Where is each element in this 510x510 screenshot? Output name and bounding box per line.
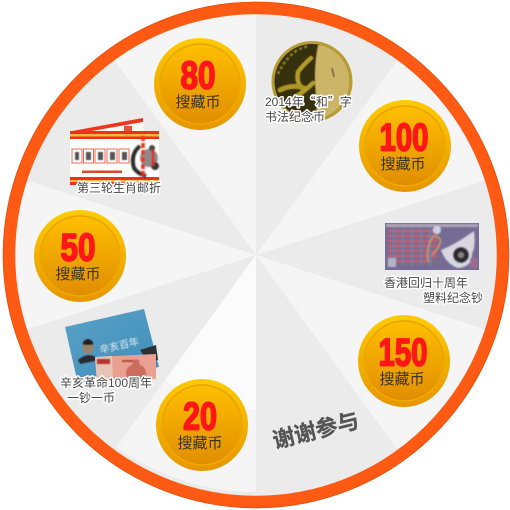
coin label: 书法纪念币 (265, 109, 325, 124)
prize image: Xinhai revolution note and coin (65, 309, 159, 384)
prize: 150 coins (358, 315, 450, 407)
coin label (265, 93, 352, 124)
banknote label: 塑料纪念钞 (423, 290, 483, 305)
prize image: commemorative coin (272, 41, 352, 122)
coin label: 2014年“和”字 (265, 93, 352, 110)
prize: 80 coins: 搜藏币 (175, 94, 221, 111)
banknote label: 香港回归十周年 (384, 276, 468, 290)
prize: 80 coins: 80 (180, 54, 216, 98)
folder label: 第三轮生肖邮折 (77, 180, 161, 195)
prize: 20 coins: 20 (183, 396, 217, 438)
prize: 20 coins: 搜藏币 (177, 435, 223, 452)
note label: 辛亥革命100周年 (60, 375, 152, 390)
prize: 100 coins: 100 (380, 116, 428, 160)
prize: 50 coins: 50 (60, 226, 96, 270)
prize: 100 coins: 搜藏币 (380, 156, 426, 173)
prize: 100 coins (359, 100, 451, 192)
prize image: Hong Kong banknote (385, 223, 479, 270)
prize: 50 coins (34, 210, 126, 302)
prize: 50 coins: 搜藏币 (55, 266, 101, 283)
note label (60, 375, 152, 405)
prize: 80 coins (154, 38, 246, 130)
prize: 20 coins (156, 379, 248, 471)
prize: 150 coins: 搜藏币 (379, 371, 425, 388)
banknote label (384, 276, 483, 305)
prize image: zodiac stamp folder (70, 118, 159, 185)
no prize text: 谢谢参与 (270, 408, 362, 453)
prize image: Xinhai revolution note and coin: 辛亥百年 (98, 335, 140, 356)
prize: 150 coins: 150 (378, 332, 428, 374)
note label: 一钞一币 (67, 390, 115, 405)
